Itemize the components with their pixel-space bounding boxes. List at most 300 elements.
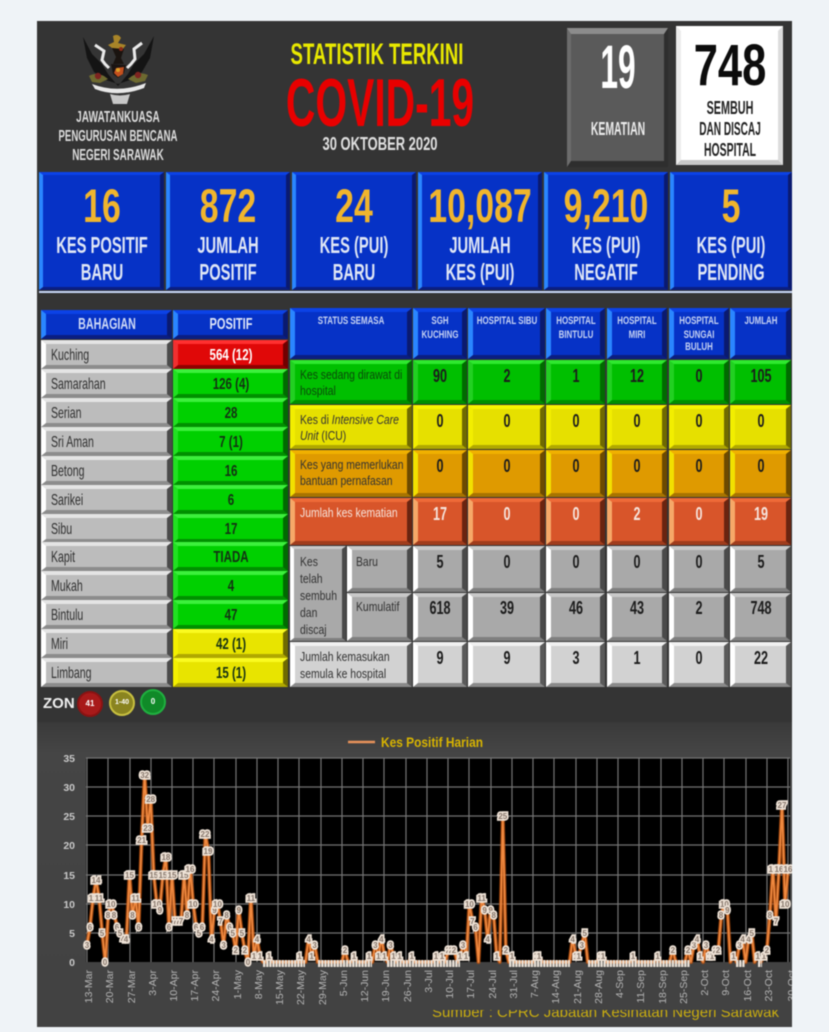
row group label: recovered and discharged: sembuh	[300, 588, 337, 603]
data labels	[85, 771, 793, 967]
row: readmissions: 0	[695, 648, 703, 668]
data labels: 1	[631, 952, 636, 961]
data labels: 5	[230, 929, 235, 938]
data labels: 3	[704, 941, 709, 950]
data labels: 8	[224, 911, 229, 920]
panel: recovered: HOSPITAL	[703, 140, 756, 160]
data labels: 8	[130, 911, 135, 920]
data labels: 3	[737, 941, 742, 950]
row: ICU: Unit (ICU)	[300, 428, 346, 443]
data labels: 1	[258, 952, 263, 961]
data labels: 18	[161, 853, 171, 862]
header row: MIRI	[629, 329, 645, 341]
row: breathing support: bantuan pernafasan	[300, 473, 393, 488]
data labels: 16	[775, 865, 784, 874]
zone: red	[77, 691, 103, 717]
header row: JUMLAH	[744, 315, 777, 327]
data labels: 7	[470, 917, 475, 926]
x axis date labels: 26-Jun	[402, 970, 414, 1002]
data labels: 1	[731, 952, 736, 961]
x axis date labels: 10-Apr	[168, 969, 180, 1002]
row: deaths: 17	[433, 504, 447, 524]
source note: Sumber : CPRC Jabatan Kesihatan Negeri Sarawak	[432, 1004, 779, 1021]
data labels: 2	[452, 946, 457, 955]
x axis date labels: 7-Aug	[529, 970, 541, 998]
data labels: 10	[152, 900, 162, 909]
panel: daily positive cases chart	[37, 730, 793, 1027]
data labels: 6	[136, 923, 141, 932]
row: breathing support: 0	[572, 456, 579, 476]
row: cumulative recoveries: 46	[568, 598, 583, 618]
y axis labels: 10	[63, 899, 75, 911]
data labels: 1	[391, 952, 396, 961]
data labels: 4	[209, 935, 214, 944]
panel: recovered	[676, 26, 783, 165]
text: committee name: JAWATANKUASA	[76, 109, 160, 126]
zone: yellow: 1-40	[115, 699, 129, 706]
x axis date labels: 31-Jul	[508, 970, 520, 999]
data labels: 23	[143, 824, 153, 833]
row: Bintulu: Bintulu	[51, 606, 83, 624]
data labels: 9	[725, 906, 730, 915]
data labels: 15	[168, 871, 177, 880]
data labels: 7	[179, 917, 184, 926]
data labels: 1	[267, 952, 272, 961]
row: Kapit: TIADA	[213, 548, 248, 566]
data labels: 4	[379, 935, 384, 944]
data labels: 4	[570, 935, 575, 944]
row: Mukah	[40, 570, 288, 601]
data labels: 1	[376, 952, 381, 961]
data labels: 3	[221, 941, 226, 950]
data labels: 6	[200, 923, 205, 932]
row: cumulative recoveries: Kumulatif	[356, 599, 399, 614]
header row: SGH	[431, 315, 449, 327]
card: kes PUI negatif: NEGATIF	[574, 259, 638, 285]
row: Mukah: Mukah	[51, 578, 83, 594]
card: jumlah positif: POSITIF	[199, 259, 257, 285]
data labels: 6	[115, 923, 120, 932]
row: readmissions: Jumlah kemasukan	[300, 649, 390, 664]
row: new recoveries	[346, 545, 792, 592]
row: ICU: 0	[436, 411, 444, 431]
data labels: 10	[781, 900, 790, 909]
data labels: 2	[233, 946, 238, 955]
data labels: 15	[180, 871, 189, 880]
x axis date labels: 22-May	[295, 969, 307, 1005]
row: cumulative recoveries: 43	[630, 598, 644, 618]
row: in hospital: 105	[750, 366, 771, 386]
row: Samarahan: Samarahan	[51, 376, 106, 392]
row: ICU	[289, 404, 792, 450]
row: Sibu: Sibu	[51, 520, 72, 538]
panel: recovered: 748	[693, 33, 766, 98]
card: kes PUI baru: BARU	[333, 259, 375, 285]
data labels: 25	[498, 812, 508, 821]
data labels: 2	[449, 946, 454, 955]
data labels: 3	[579, 941, 584, 950]
data labels: 10	[213, 900, 222, 909]
card: kes PUI baru: 24	[335, 179, 373, 232]
data labels: 1	[397, 952, 402, 961]
legend: zones	[42, 688, 167, 718]
row: breathing support: Kes yang memerlukan	[300, 457, 403, 472]
row group label: recovered and discharged: discaj	[300, 622, 327, 637]
x axis date labels: 25-Sep	[678, 970, 690, 1004]
data line: daily positive cases	[87, 775, 788, 962]
header row: HOSPITAL SIBU	[476, 315, 537, 327]
data labels: 1	[440, 952, 445, 961]
data labels: 6	[194, 923, 199, 932]
data labels: 5	[197, 929, 202, 938]
row: Serian: Serian	[51, 404, 82, 422]
header row: BULUH	[685, 341, 713, 353]
x axis date labels: 12-Jun	[359, 970, 371, 1002]
header row	[289, 307, 792, 360]
data labels: 8	[768, 911, 773, 920]
data labels: 1	[297, 952, 302, 961]
header: bahagian and positif: POSITIF	[209, 316, 252, 332]
row: Sibu: 17	[224, 520, 237, 538]
row group label: recovered and discharged: telah	[300, 571, 323, 586]
row: in hospital: 12	[630, 366, 644, 386]
data labels: 19	[204, 847, 213, 856]
data labels: 2	[713, 946, 718, 955]
data labels: 1	[494, 952, 499, 961]
data labels: 2	[686, 946, 691, 955]
data labels: 11	[247, 894, 256, 903]
data labels: 10	[189, 900, 198, 909]
data labels: 9	[237, 906, 242, 915]
x axis date labels: 5-Jun	[338, 970, 350, 996]
row: Miri	[40, 628, 288, 659]
data labels: 1	[707, 952, 712, 961]
row: Sarikei: 6	[227, 492, 234, 508]
data labels: 2	[765, 946, 770, 955]
row: readmissions: 1	[633, 648, 641, 668]
row: ICU: Kes di Intensive Care	[300, 412, 399, 427]
data labels: 2	[671, 946, 676, 955]
header row: SUNGAI	[684, 329, 714, 341]
row: Limbang: 15 (1)	[215, 664, 246, 682]
data labels: 16	[186, 865, 195, 874]
data labels: 2	[504, 946, 509, 955]
row: new recoveries: Baru	[356, 554, 378, 569]
x axis date labels: 24-Jul	[487, 970, 499, 999]
text: committee name	[58, 109, 178, 164]
data labels: 15	[158, 871, 168, 880]
zone: green	[140, 689, 166, 715]
row: ICU: 0	[633, 411, 641, 431]
data labels: 10	[107, 900, 116, 909]
data labels: 1	[367, 952, 372, 961]
row: deaths: 0	[695, 504, 703, 524]
card: kes positif baru: KES POSITIF	[56, 232, 147, 258]
row: Samarahan: 126 (4)	[212, 376, 249, 392]
data labels: 7	[774, 917, 779, 926]
row: in hospital: 1	[572, 366, 579, 386]
header row: HOSPITAL	[679, 315, 719, 327]
x axis date labels: 8-May	[253, 969, 265, 999]
x axis date labels: 10-Jul	[444, 970, 456, 999]
row: in hospital: Kes sedang dirawat di	[300, 367, 402, 382]
panel: deaths: KEMATIAN	[590, 119, 645, 139]
data labels: 9	[482, 906, 487, 915]
card: kes PUI pending	[670, 172, 792, 290]
x axis date labels: 13-Mar	[83, 970, 95, 1003]
data labels: 7	[173, 917, 178, 926]
x axis date labels: 17-Jul	[465, 970, 477, 999]
row: in hospital: hospital	[300, 383, 336, 398]
row: Sarikei: Sarikei	[51, 492, 83, 508]
data labels: 1	[598, 952, 603, 961]
card: kes PUI baru: KES (PUI)	[320, 232, 388, 258]
row: Kuching: 564 (12)	[209, 346, 252, 364]
data labels: 5	[118, 929, 123, 938]
x axis date labels: 11-Sep	[635, 970, 647, 1003]
row: new recoveries: 0	[695, 552, 703, 572]
row: Sarikei	[40, 484, 288, 515]
data labels: 9	[212, 906, 217, 915]
data labels: 3	[461, 941, 466, 950]
data labels: 1	[655, 952, 660, 961]
y axis labels: 20	[63, 840, 75, 852]
data labels: 6	[473, 923, 478, 932]
data labels: 9	[158, 906, 163, 915]
card: kes PUI negatif: 9,210	[564, 179, 648, 232]
row: Sri Aman	[40, 426, 288, 457]
data labels: 1	[573, 952, 578, 961]
row: Samarahan	[40, 368, 288, 399]
card: kes PUI pending: PENDING	[697, 259, 765, 285]
data labels: 5	[240, 929, 245, 938]
data labels: 0	[103, 958, 108, 967]
header row: HOSPITAL	[617, 315, 657, 327]
x axis date labels: 9-Oct	[720, 970, 732, 996]
row: readmissions: 9	[436, 648, 444, 668]
data labels: 3	[692, 941, 697, 950]
data labels: 27	[778, 801, 787, 810]
plot area	[86, 758, 790, 962]
data labels: 8	[719, 911, 724, 920]
row: cumulative recoveries: 39	[499, 598, 514, 618]
data labels: 4	[306, 935, 311, 944]
data labels: 2	[243, 946, 248, 955]
row: Betong: 16	[224, 462, 237, 480]
data labels: 1	[755, 952, 760, 961]
card: kes positif baru: BARU	[80, 259, 123, 285]
x axis date labels: 1-May	[232, 969, 244, 999]
data labels: 4	[740, 935, 745, 944]
x axis date labels: 3-Apr	[147, 970, 159, 996]
y axis labels: 35	[63, 753, 75, 765]
row: Limbang	[40, 657, 288, 688]
data labels: 1	[434, 952, 439, 961]
data labels: 8	[106, 911, 111, 920]
data labels: 4	[124, 935, 129, 944]
row: ICU: 0	[695, 411, 703, 431]
row: Kuching: Kuching	[51, 346, 89, 364]
data labels: 15	[149, 871, 159, 880]
data labels: 8	[491, 911, 496, 920]
row: in hospital	[289, 359, 792, 404]
x axis date labels: 15-May	[274, 969, 286, 1005]
row: breathing support: 0	[503, 456, 510, 476]
x axis date labels: 29-May	[317, 969, 329, 1005]
row: Mukah: 4	[227, 578, 234, 594]
row: Bintulu	[40, 599, 288, 630]
data labels: 7	[176, 917, 181, 926]
row: Sri Aman: 7 (1)	[219, 434, 242, 450]
row: ICU: 0	[503, 411, 510, 431]
row: cumulative recoveries: 618	[429, 598, 451, 618]
data labels: 1	[464, 952, 469, 961]
data labels: 1	[762, 952, 767, 961]
card: jumlah kes PUI	[418, 172, 542, 290]
row: readmissions	[289, 641, 792, 688]
x axis date labels: 20-Mar	[104, 970, 116, 1003]
title: COVID-19: COVID-19	[285, 64, 474, 140]
data labels: 3	[373, 941, 378, 950]
x axis date labels: 2-Oct	[699, 970, 711, 996]
y axis labels: 5	[69, 928, 75, 940]
row: breathing support: 0	[633, 456, 641, 476]
row: in hospital: 90	[433, 366, 447, 386]
data labels: 1	[537, 952, 542, 961]
x axis date labels: 14-Aug	[550, 970, 562, 1004]
data labels: 1	[309, 952, 314, 961]
row: Bintulu: 47	[224, 606, 237, 624]
x axis date labels: 17-Apr	[189, 969, 201, 1002]
card: kes positif baru: 16	[83, 179, 120, 232]
data labels: 5	[749, 929, 754, 938]
row: Serian	[40, 397, 288, 428]
row: readmissions: semula ke hospital	[300, 666, 386, 681]
data labels: 8	[185, 911, 190, 920]
data labels: 2	[343, 946, 348, 955]
legend: kes positif harian: Kes Positif Harian	[381, 734, 483, 750]
row: deaths: 2	[633, 504, 641, 524]
x axis date labels: 23-Oct	[763, 970, 775, 1002]
row: cumulative recoveries: 748	[750, 598, 771, 618]
data labels: 2	[716, 946, 721, 955]
row group label: recovered and discharged: Kes	[300, 554, 318, 569]
x axis date labels: 28-Aug	[593, 970, 605, 1004]
card: kes positif baru	[39, 172, 164, 290]
card: kes PUI negatif: KES (PUI)	[572, 232, 640, 258]
row: cumulative recoveries	[346, 592, 792, 642]
data labels: 14	[92, 876, 101, 885]
data labels: 7	[218, 917, 223, 926]
panel: recovered: DAN DISCAJ	[699, 119, 760, 139]
row: ICU: 0	[757, 411, 764, 431]
data labels: 15	[125, 871, 134, 880]
y axis labels: 30	[63, 782, 75, 794]
card: jumlah positif: 872	[200, 179, 256, 232]
row: new recoveries: 0	[503, 552, 510, 572]
data labels: 1	[698, 952, 703, 961]
header row: HOSPITAL	[556, 315, 595, 327]
x axis date labels: 3-Jul	[423, 970, 435, 993]
zone: red: 41	[86, 699, 94, 708]
data labels: 3	[312, 941, 317, 950]
data labels: 22	[201, 830, 210, 839]
row: in hospital: 0	[695, 366, 703, 386]
card: jumlah positif: JUMLAH	[197, 232, 259, 258]
row: deaths: 19	[753, 504, 768, 524]
row: Serian: 28	[224, 404, 237, 422]
header row: STATUS SEMASA	[318, 315, 384, 327]
data labels: 1	[382, 952, 387, 961]
row: new recoveries: 0	[572, 552, 579, 572]
row: deaths: 0	[572, 504, 579, 524]
data labels: 3	[388, 941, 393, 950]
data labels: 1	[534, 952, 539, 961]
y axis labels: 0	[69, 957, 75, 969]
data labels: 11	[131, 894, 140, 903]
row: Betong: Betong	[51, 462, 84, 480]
row: ICU: 0	[572, 411, 579, 431]
x axis date labels: 27-Mar	[126, 970, 138, 1003]
data labels: 6	[88, 923, 93, 932]
legend: zones: ZON	[43, 695, 75, 712]
row: Kapit: Kapit	[51, 548, 75, 566]
data labels: 8	[112, 911, 117, 920]
card: kes PUI baru	[292, 172, 416, 290]
x axis date labels: 21-Aug	[572, 970, 584, 1004]
card: kes PUI pending: KES (PUI)	[697, 232, 765, 258]
data labels: 4	[121, 935, 126, 944]
data labels: 28	[146, 795, 156, 804]
row: deaths	[289, 497, 792, 546]
data labels: 1	[352, 952, 357, 961]
card: kes PUI pending: 5	[722, 179, 740, 232]
data labels: 1	[409, 952, 414, 961]
data labels: 16	[769, 865, 778, 874]
row: new recoveries: 0	[633, 552, 641, 572]
row group label: recovered and discharged: dan	[300, 605, 317, 620]
panel: deaths: 19	[600, 33, 635, 101]
data labels: 3	[85, 941, 90, 950]
row: breathing support	[289, 449, 792, 498]
row: Betong	[40, 455, 288, 486]
card: jumlah kes PUI: JUMLAH	[449, 232, 511, 258]
panel: recovered: SEMBUH	[706, 98, 753, 118]
data labels: 6	[167, 923, 172, 932]
row: deaths: Jumlah kes kematian	[300, 505, 398, 520]
row group label: recovered and discharged	[290, 546, 346, 641]
card: kes PUI negatif	[544, 172, 668, 290]
row: new recoveries: 5	[436, 552, 444, 572]
icon: Sarawak crest	[83, 34, 154, 105]
row: breathing support: 0	[757, 456, 764, 476]
x axis date labels: 19-Jun	[380, 970, 392, 1002]
header row: BINTULU	[558, 329, 593, 341]
data labels: 1	[458, 952, 463, 961]
data labels: 6	[227, 923, 232, 932]
legend: kes positif harian	[348, 734, 483, 750]
data labels: 32	[140, 771, 150, 780]
card: jumlah positif	[166, 172, 290, 290]
header: bahagian and positif	[40, 309, 288, 340]
data labels: 11	[89, 894, 98, 903]
row: breathing support: 0	[436, 456, 444, 476]
panel: headline statistics	[38, 171, 792, 290]
y axis labels	[63, 753, 75, 969]
data labels: 10	[465, 900, 474, 909]
y axis labels: 15	[63, 870, 75, 882]
text: committee name: NEGERI SARAWAK	[72, 147, 164, 164]
